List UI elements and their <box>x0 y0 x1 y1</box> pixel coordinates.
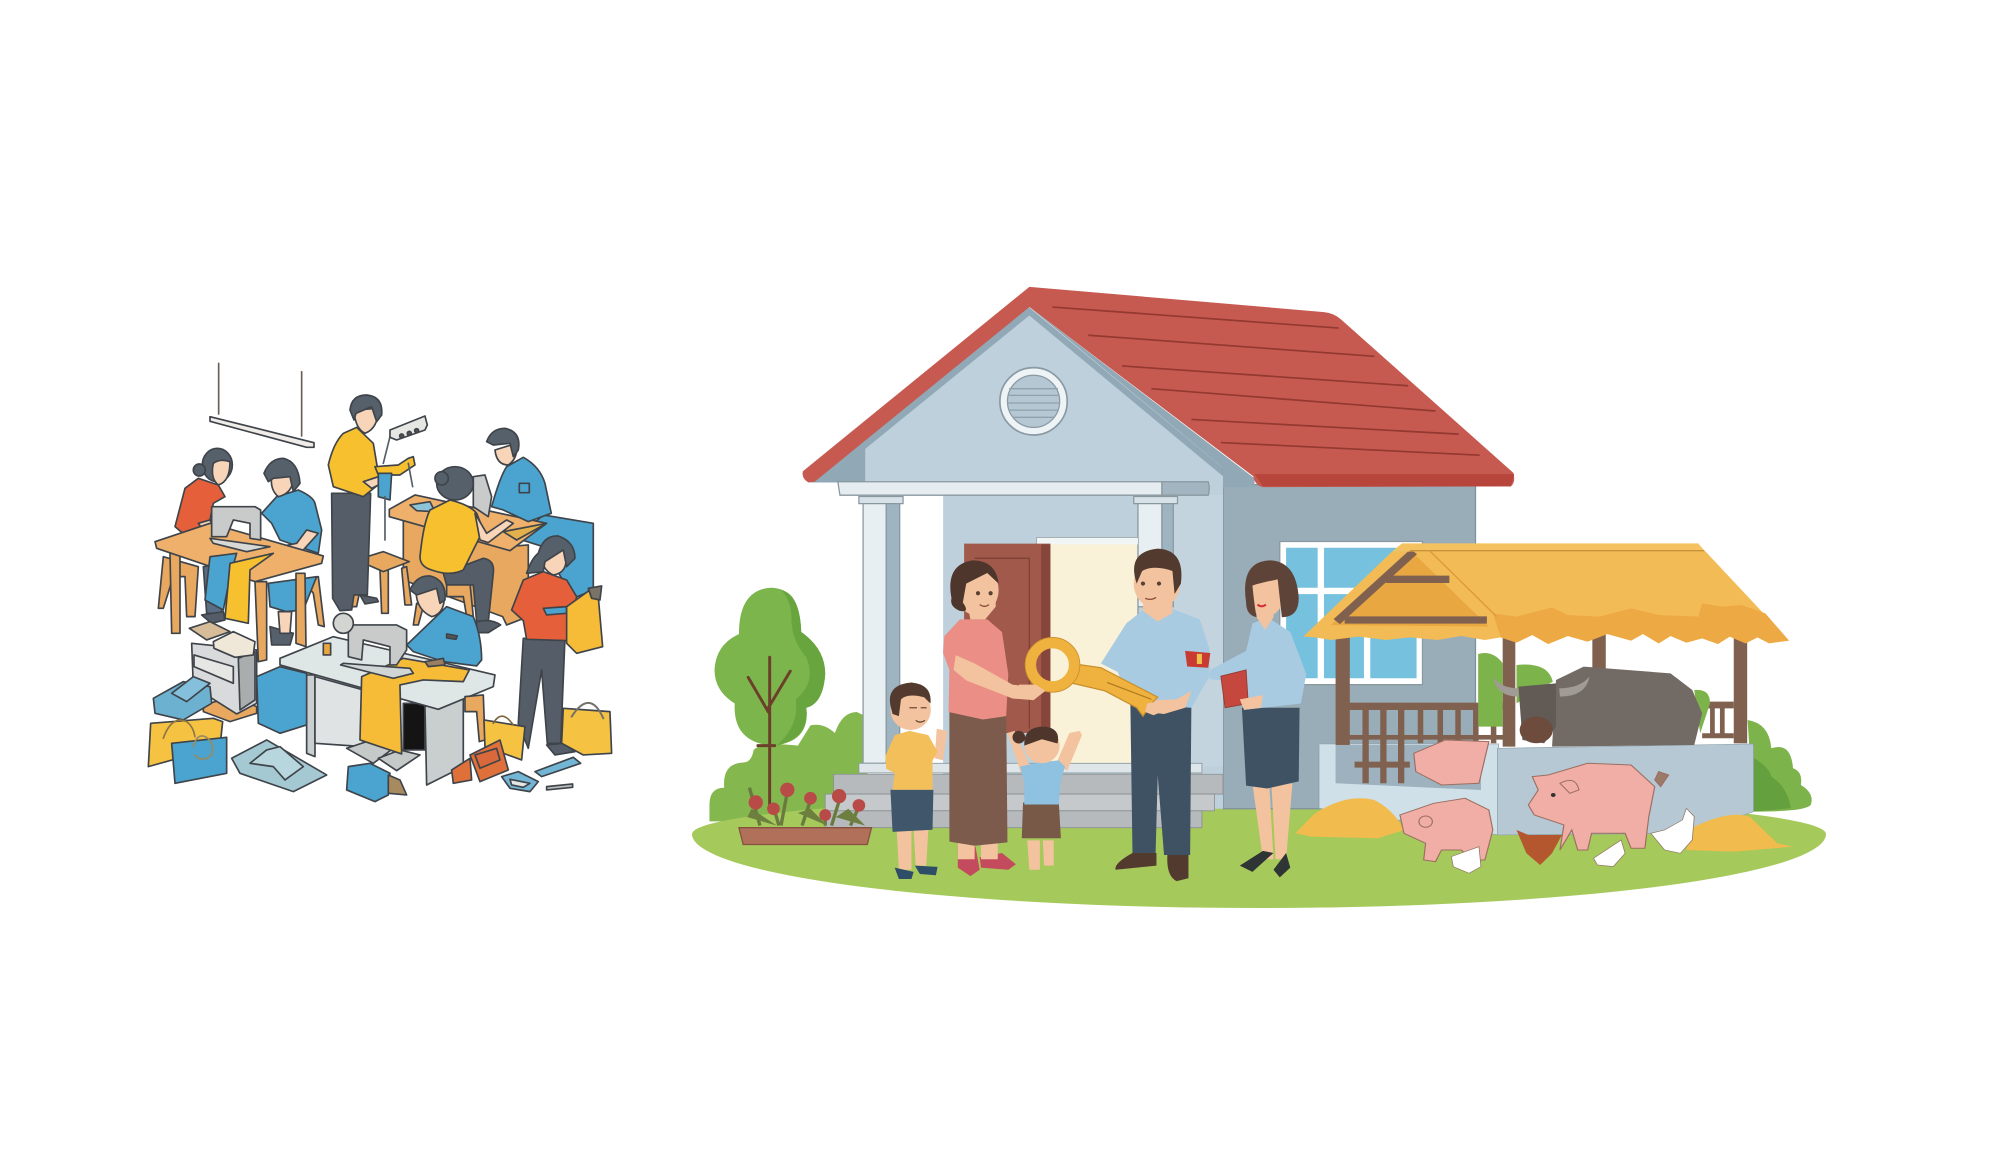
thatched roof <box>1303 543 1789 644</box>
officer woman in shirt and skirt <box>1209 560 1306 877</box>
back drawers with supplies <box>189 622 257 722</box>
seated stool behind woman <box>413 583 473 625</box>
father in blue shirt with armband <box>1101 549 1210 881</box>
middle stool <box>352 552 412 613</box>
woman in blue at left machine <box>262 458 322 645</box>
side wall <box>1223 464 1476 809</box>
small pig <box>1400 798 1493 862</box>
chickens <box>1451 808 1694 873</box>
woman in blue sewing at front table <box>407 576 482 666</box>
left table with yellow and blue cloth <box>155 507 323 662</box>
orange satchel <box>452 740 508 783</box>
scissors and ruler <box>502 757 581 792</box>
flower box <box>739 783 872 845</box>
seated woman in yellow at back table <box>420 467 513 633</box>
concrete pen wall <box>1319 744 1754 835</box>
standing woman in red holding garment <box>512 536 603 755</box>
tree <box>715 588 825 805</box>
mother in pink and brown skirt <box>943 560 1042 876</box>
ceiling lamp <box>210 363 314 447</box>
front grey sewing table <box>280 637 495 785</box>
folded blue bags left <box>153 677 212 720</box>
large pig <box>1528 763 1669 850</box>
illustration: sewing workshop <box>148 363 612 802</box>
animal shelter and livestock <box>1295 543 1793 873</box>
red roof <box>803 287 1514 487</box>
woman in red at left machine <box>175 448 232 623</box>
pig in the pen <box>1414 740 1489 785</box>
standing man in yellow with tape and lamp <box>328 395 427 611</box>
round vent <box>1000 368 1067 435</box>
ground <box>692 794 1826 908</box>
eye of large pig <box>1551 793 1556 797</box>
house <box>739 287 1514 881</box>
yellow garment on front table <box>360 658 469 754</box>
blue case <box>257 667 307 733</box>
water buffalo <box>1493 667 1702 747</box>
left bushes and tree group <box>709 588 867 821</box>
porch gable <box>810 306 1255 809</box>
porch beam <box>838 482 1209 495</box>
window <box>1280 541 1422 685</box>
yellow bag far right <box>562 703 612 755</box>
man in blue shirt at back table <box>487 428 551 522</box>
bush behind left of house <box>709 712 867 821</box>
left table stools <box>158 557 324 627</box>
porch steps <box>825 763 1223 828</box>
background green tree through coop <box>1478 653 1710 733</box>
yellow tote bag left <box>148 718 223 767</box>
thatch posts and rails <box>1336 617 1747 783</box>
blue bag on floor <box>347 763 407 802</box>
doorway and open door <box>964 538 1138 766</box>
right bush behind coop <box>1748 720 1812 812</box>
white space between columns <box>900 497 943 765</box>
porch columns <box>859 496 1178 763</box>
yellow bag right of table <box>484 716 525 760</box>
back right table with blue cloth <box>389 475 593 625</box>
hands over key <box>1019 685 1168 715</box>
giant golden key <box>1025 637 1158 716</box>
blue tote bag left <box>172 736 227 783</box>
folded pale garment <box>232 740 327 792</box>
boy in yellow shirt <box>885 682 947 879</box>
hay piles <box>1295 798 1793 852</box>
little girl in blue <box>1007 727 1082 870</box>
front sewing machine <box>323 613 413 678</box>
